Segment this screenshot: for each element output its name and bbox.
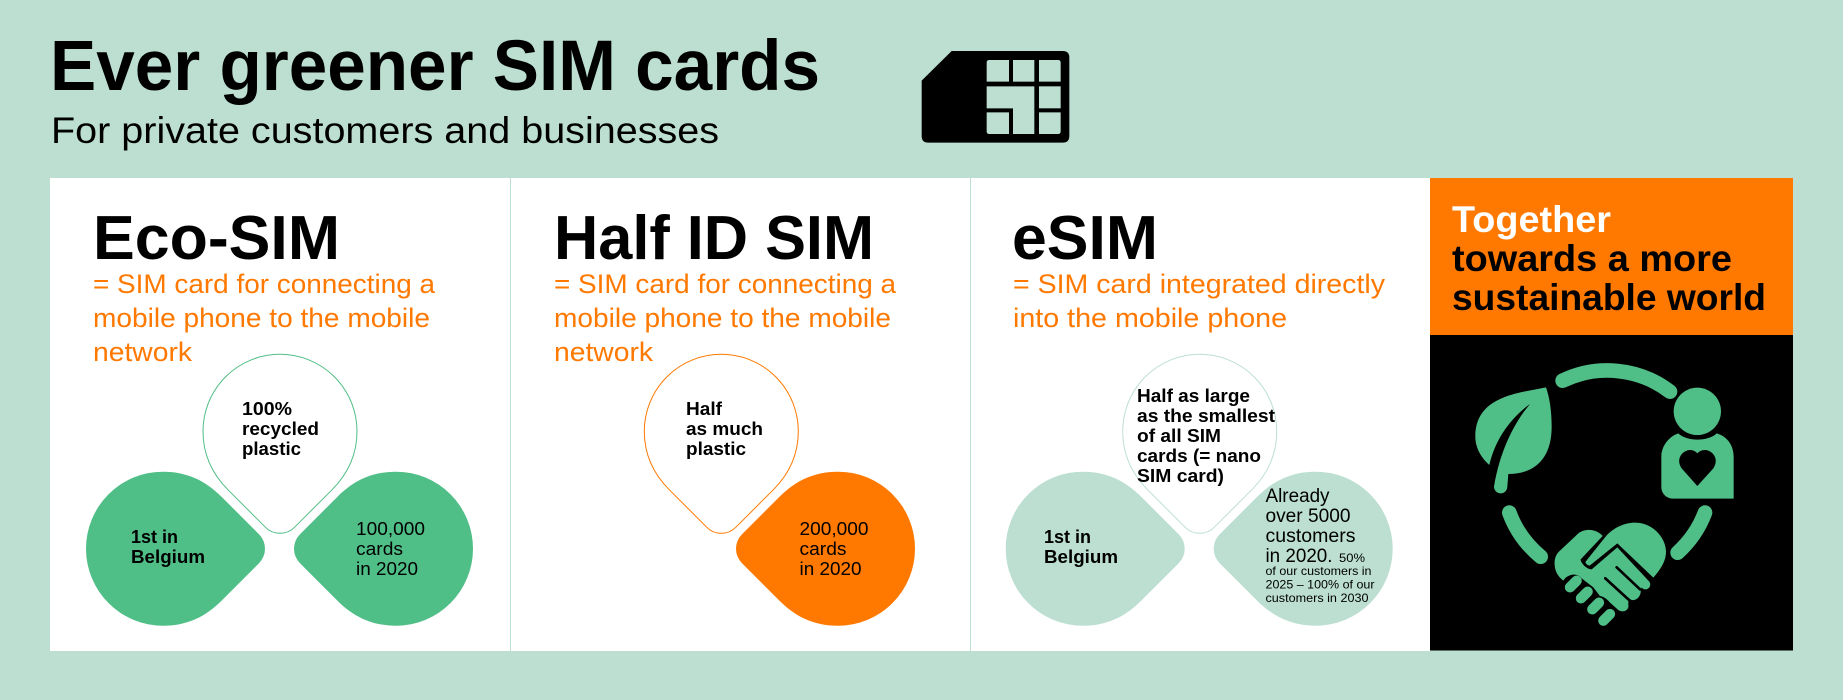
drop: 100,000 cards in 2020: 100,000 <box>356 519 425 539</box>
description: Eco-SIM: = SIM card for connecting a <box>93 269 436 299</box>
drop: 100,000 cards in 2020 <box>294 472 473 626</box>
drop: customers targets: in 2020. <box>1266 546 1332 567</box>
drop: half as large: as the smallest <box>1137 406 1275 426</box>
drop: half as large: of all SIM <box>1137 426 1221 446</box>
icon: person with heart <box>1661 388 1734 499</box>
drop: half as large: Half as large <box>1137 386 1250 406</box>
heading: together towards a more sustainable world <box>1452 199 1766 318</box>
drop: 1st in Belgium: Belgium <box>1044 547 1118 567</box>
icon: SIM card <box>922 51 1069 143</box>
drop: 1st in Belgium: 1st in <box>131 527 178 547</box>
panel: eSIM <box>1006 204 1393 626</box>
drop: customers targets: customers <box>1266 526 1356 547</box>
drop: customers targets: Already <box>1266 486 1330 507</box>
drop: customers targets: of our customers in <box>1266 564 1372 578</box>
heading: eSIM: eSIM <box>1012 204 1158 273</box>
drop: 100% recycled plastic: plastic <box>242 439 301 459</box>
heading: together towards a more sustainable world: towards a more <box>1452 238 1732 279</box>
description: Eco-SIM: network <box>93 337 193 367</box>
drop: customers targets: 50% <box>1339 551 1365 565</box>
drop: customers targets: over 5000 <box>1266 506 1350 527</box>
drop: half as much plastic: Half <box>686 399 723 419</box>
drop: customers targets: 2025 – 100% of our <box>1266 578 1375 592</box>
description: Half ID SIM: = SIM card for connecting a <box>554 269 897 299</box>
title: Ever greener SIM cards <box>50 27 820 106</box>
description: Eco-SIM: mobile phone to the mobile <box>93 303 430 333</box>
drop: 100,000 cards in 2020: cards <box>356 539 403 559</box>
drop: half as much plastic <box>644 354 798 533</box>
drop: customers targets: customers in 2030 <box>1266 591 1369 605</box>
drop: half as much plastic: as much <box>686 419 763 439</box>
description: Half ID SIM: network <box>554 337 654 367</box>
description: eSIM <box>1013 269 1386 333</box>
icon: circle arcs <box>1509 371 1705 557</box>
drop: half as large: cards (= nano <box>1137 446 1261 466</box>
drop: half as much plastic: plastic <box>686 439 746 459</box>
subtitle: For private customers and businesses <box>51 110 719 151</box>
description: Half ID SIM <box>554 269 897 367</box>
icon: handshake <box>1555 523 1666 621</box>
drop: 100% recycled plastic: recycled <box>242 419 319 439</box>
description: eSIM: into the mobile phone <box>1013 303 1287 333</box>
heading: together towards a more sustainable world: Together <box>1452 199 1611 240</box>
drop: 100,000 cards in 2020: in 2020 <box>356 559 418 579</box>
panel: white card background <box>50 178 1430 651</box>
drop: half as large: SIM card) <box>1137 466 1224 486</box>
drop: 1st in Belgium: 1st in <box>1044 527 1091 547</box>
description: Half ID SIM: mobile phone to the mobile <box>554 303 891 333</box>
drop: 200,000 cards in 2020: in 2020 <box>800 559 862 579</box>
drop: customers targets <box>1214 472 1393 626</box>
description: Eco-SIM <box>93 269 436 367</box>
panel: Half ID SIM <box>554 204 915 626</box>
drop: 1st in Belgium <box>86 472 265 626</box>
heading: together towards a more sustainable world: sustainable world <box>1452 277 1766 318</box>
panel: sustainability <box>1430 178 1793 650</box>
drop: 1st in Belgium <box>1006 472 1185 626</box>
drop: 100% recycled plastic: 100% <box>242 399 292 419</box>
heading: Half ID SIM: Half ID SIM <box>554 204 874 273</box>
icon: sustainability circle <box>1475 371 1734 621</box>
icon: leaf <box>1475 387 1552 493</box>
drop: 200,000 cards in 2020 <box>736 472 915 626</box>
drop: 1st in Belgium: Belgium <box>131 547 205 567</box>
heading: Eco-SIM: Eco-SIM <box>93 204 340 273</box>
drop: 200,000 cards in 2020: 200,000 <box>800 519 868 539</box>
drop: 100% recycled plastic <box>203 354 357 533</box>
drop: 200,000 cards in 2020: cards <box>800 539 846 559</box>
drop: half as large <box>1123 354 1277 533</box>
panel: Eco-SIM <box>86 204 473 626</box>
description: eSIM: = SIM card integrated directly <box>1013 269 1386 299</box>
